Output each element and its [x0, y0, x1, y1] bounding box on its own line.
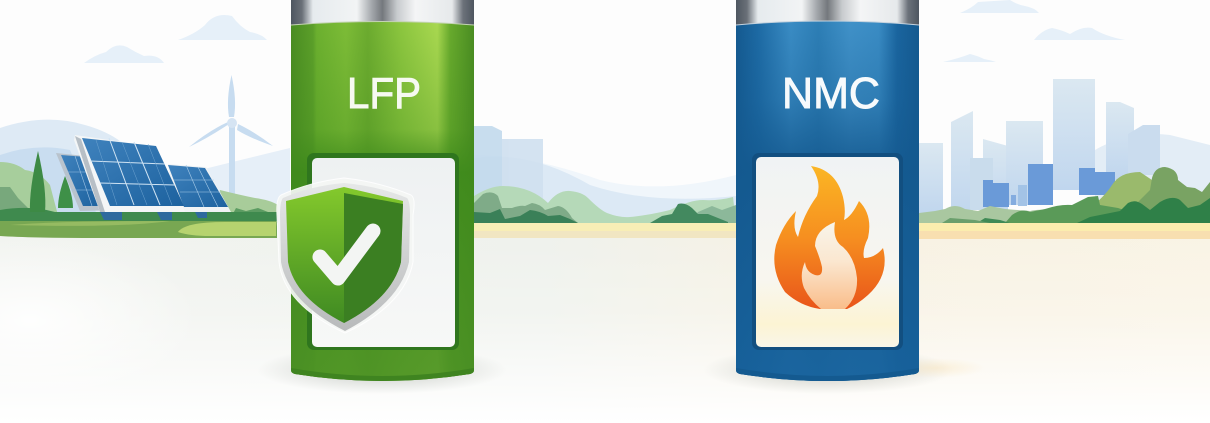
- green body: [291, 22, 474, 381]
- check mark: [320, 231, 373, 278]
- mountains: left and middle: [0, 120, 736, 222]
- grass foreground: [0, 221, 277, 238]
- main panel: [74, 135, 185, 212]
- metal cap: [736, 0, 919, 25]
- city left-of-centre: [474, 126, 543, 200]
- trees and hills right: [919, 167, 1210, 223]
- battery: NMC: [736, 0, 919, 381]
- trees and hills middle: [474, 186, 736, 223]
- back-left panel: [56, 153, 120, 211]
- battery: LFP: [291, 0, 474, 381]
- metal cap: [291, 0, 474, 25]
- ground: [0, 223, 1210, 423]
- conifer trees: [30, 151, 45, 212]
- bottom rim shading: [291, 368, 474, 381]
- icon: shield with check mark: [277, 178, 414, 333]
- left hills and trees: [0, 151, 278, 224]
- yellow sand bands: [474, 223, 1210, 239]
- shadow under NMC battery: [703, 346, 953, 394]
- shadow under LFP battery: [257, 346, 507, 394]
- white panel: [307, 153, 459, 350]
- city skyline right: [919, 79, 1210, 215]
- icon: flame: [774, 166, 885, 309]
- blue buildings: [983, 164, 1115, 207]
- white panel: [752, 153, 903, 350]
- blue body: [736, 21, 919, 381]
- bottom rim shading: [736, 368, 919, 381]
- warm glow near NMC battery: [885, 358, 985, 378]
- label: LFP: [347, 69, 421, 118]
- right panel: [168, 164, 231, 212]
- wind turbine: [189, 75, 273, 197]
- clouds: [84, 0, 1125, 63]
- solar panels: [56, 135, 231, 220]
- label: NMC: [782, 69, 880, 118]
- supports: [100, 212, 207, 220]
